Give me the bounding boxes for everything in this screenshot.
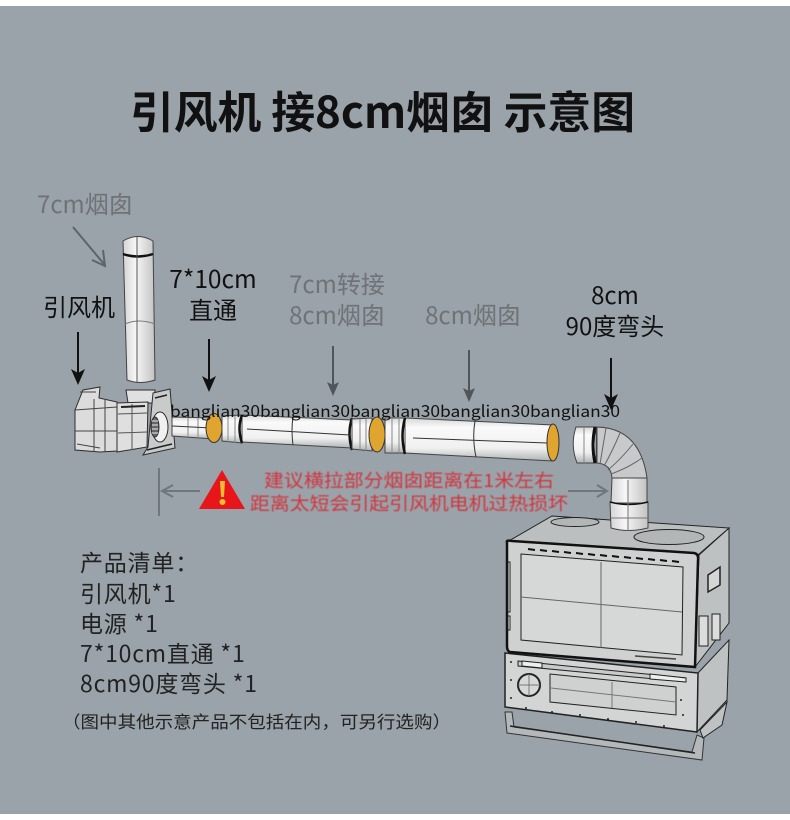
- product list: 7*10cm直通 *1: [80, 635, 246, 669]
- warning text: [250, 467, 568, 516]
- warning icon: [199, 470, 245, 509]
- horizontal chimney run: [172, 414, 559, 461]
- label: 7cm chimney with arrow: [37, 185, 133, 266]
- label: 7*10cm straight with arrow: [169, 261, 257, 392]
- distance dimension arrows: [159, 468, 607, 516]
- stove upper section: [507, 516, 729, 667]
- label: 7cm to 8cm adapter with arrow: 7cm转接: [289, 265, 385, 300]
- vertical 7cm chimney: [123, 236, 155, 382]
- product list: 电源 *1: [80, 605, 159, 639]
- title: 引风机 接8cm烟囱 示意图: [130, 77, 635, 141]
- product list: 8cm90度弯头 *1: [80, 665, 258, 699]
- label: 7*10cm straight with arrow: 7*10cm: [169, 261, 257, 296]
- draft fan: [75, 387, 175, 455]
- label: draft fan with arrow: [43, 288, 115, 385]
- product list: 产品清单：: [80, 544, 199, 578]
- label: 7cm to 8cm adapter with arrow: [289, 265, 385, 396]
- repeated watermark text: banglian30banglian30banglian30banglian30banglian30: [170, 398, 620, 422]
- label: 7cm chimney with arrow: 7cm烟囱: [37, 185, 133, 220]
- label: 8cm 90 degree elbow with arrow: 8cm: [591, 276, 639, 311]
- label: 8cm 90 degree elbow with arrow: 90度弯头: [566, 307, 664, 342]
- label: 7*10cm straight with arrow: 直通: [189, 291, 237, 326]
- footnote: （图中其他示意产品不包括在内，可另行选购）: [62, 708, 451, 733]
- label: draft fan with arrow: 引风机: [43, 288, 115, 323]
- warning text: 距离太短会引起引风机电机过热损坏: [250, 490, 568, 516]
- label: 7cm to 8cm adapter with arrow: 8cm烟囱: [289, 296, 385, 331]
- label: 8cm chimney with arrow: 8cm烟囱: [425, 296, 521, 331]
- product list: [80, 544, 258, 699]
- label: 8cm chimney with arrow: [425, 296, 521, 402]
- label: 8cm 90 degree elbow with arrow: [566, 276, 664, 410]
- stove lower section: [505, 640, 729, 732]
- warning text: 建议横拉部分烟囱距离在1米左右: [264, 467, 554, 493]
- stove: [505, 516, 729, 760]
- product list: 引风机*1: [80, 575, 177, 609]
- stove legs: [505, 702, 727, 760]
- 90 degree elbow: [573, 427, 648, 531]
